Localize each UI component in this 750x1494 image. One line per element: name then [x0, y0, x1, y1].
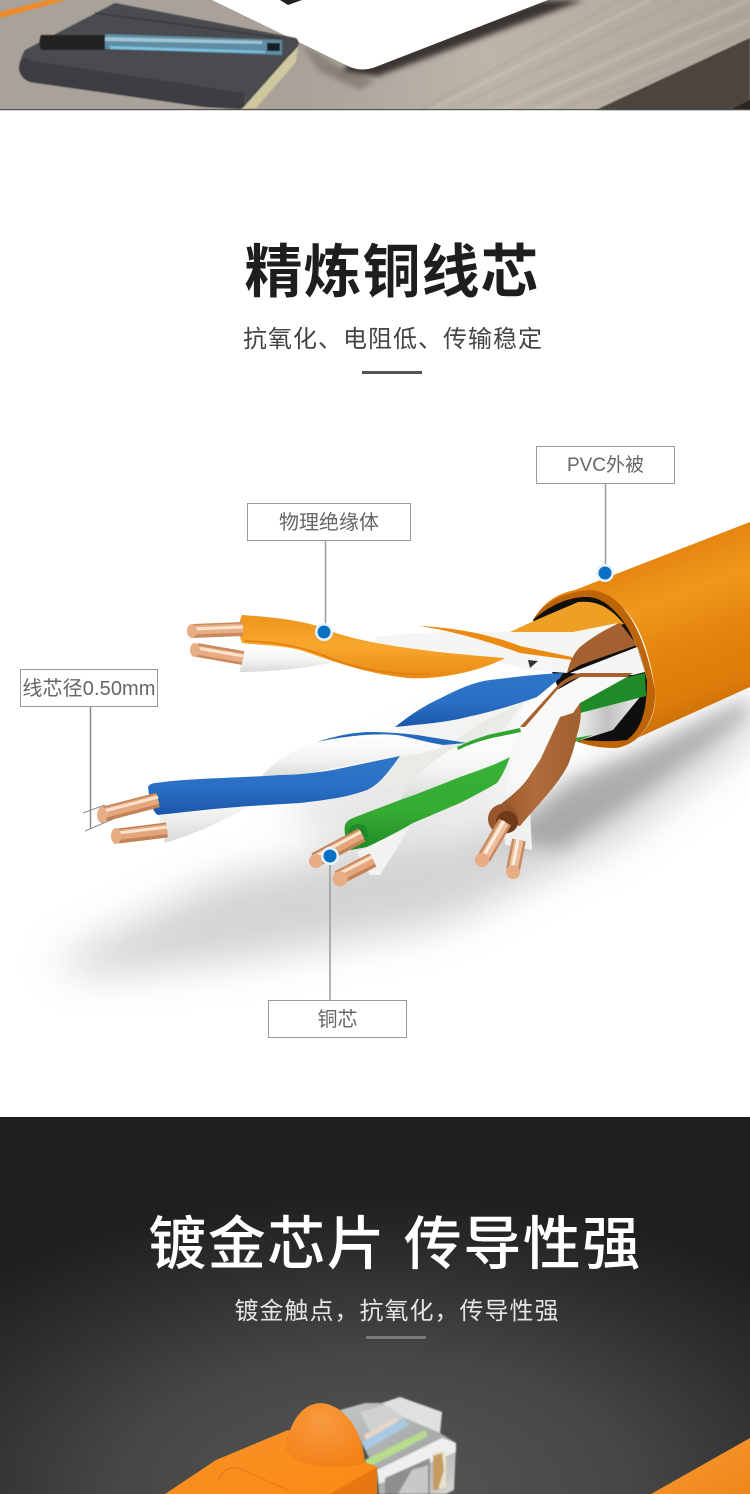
clear plug body	[340, 1397, 456, 1494]
cable illustration	[62, 484, 750, 1000]
panel: gold plated chip	[0, 1117, 750, 1494]
white wire pair: orange	[240, 623, 618, 673]
label: copper core	[268, 1000, 407, 1038]
marker dot: copper core	[321, 847, 339, 865]
subtitle: copper core benefits: 抗氧化、电阻低、传输稳定	[243, 326, 543, 353]
subtitle: chip benefits: 镀金触点，抗氧化，传导性强	[234, 1298, 560, 1325]
diameter dimension ticks	[83, 805, 113, 831]
gray white wire inside jacket	[574, 697, 640, 742]
leader line: PVC jacket	[604, 484, 606, 568]
leader line: copper core	[329, 862, 331, 1000]
marker dot: insulation	[315, 623, 333, 641]
orange insulated wire	[239, 615, 505, 678]
notebook	[19, 3, 299, 109]
label: physical insulation: 物理绝缘体	[279, 512, 379, 534]
orange dome tab	[286, 1403, 365, 1467]
heading underline	[362, 371, 422, 374]
label: core diameter: 线芯径0.50mm	[22, 678, 156, 700]
blue pair conductors	[97, 797, 167, 844]
label: copper core: 铜芯	[318, 1009, 358, 1031]
orange cable, right	[651, 1438, 750, 1494]
green insulated wire	[345, 673, 646, 850]
upper brown wire	[567, 623, 637, 673]
blue insulated wire	[148, 673, 563, 815]
pen	[40, 34, 282, 55]
cable jacket	[533, 522, 750, 748]
white wire behind brown	[570, 647, 645, 675]
heading: refined copper core: 精炼铜线芯	[244, 240, 540, 305]
subtitle underline	[366, 1336, 426, 1339]
orange pair conductors	[187, 624, 243, 658]
brown pair conductors	[475, 821, 520, 879]
label: physical insulation	[247, 503, 411, 541]
green pair conductors	[309, 832, 373, 886]
heading: gold plated chip: 镀金芯片 传导性强	[148, 1212, 642, 1277]
leader line: insulation	[324, 541, 326, 626]
label: PVC jacket	[536, 446, 675, 484]
label: core diameter	[20, 669, 158, 707]
orange boot	[165, 1430, 377, 1494]
cable opening interior	[533, 597, 648, 745]
white wire pair: blue	[158, 702, 527, 843]
brown and white twisted pair	[488, 673, 633, 850]
leader line: core diameter	[90, 707, 92, 829]
white wire pair: green	[357, 728, 521, 875]
RJ45 connector and cable	[165, 1396, 750, 1494]
copper conductors	[97, 624, 520, 886]
label: PVC jacket: PVC外被	[567, 455, 644, 476]
arrow mark	[528, 660, 538, 668]
top desk photo	[0, 0, 750, 111]
marker dot: PVC jacket	[596, 564, 614, 582]
shadow on ground	[50, 698, 750, 975]
inner orange wire	[510, 602, 624, 633]
